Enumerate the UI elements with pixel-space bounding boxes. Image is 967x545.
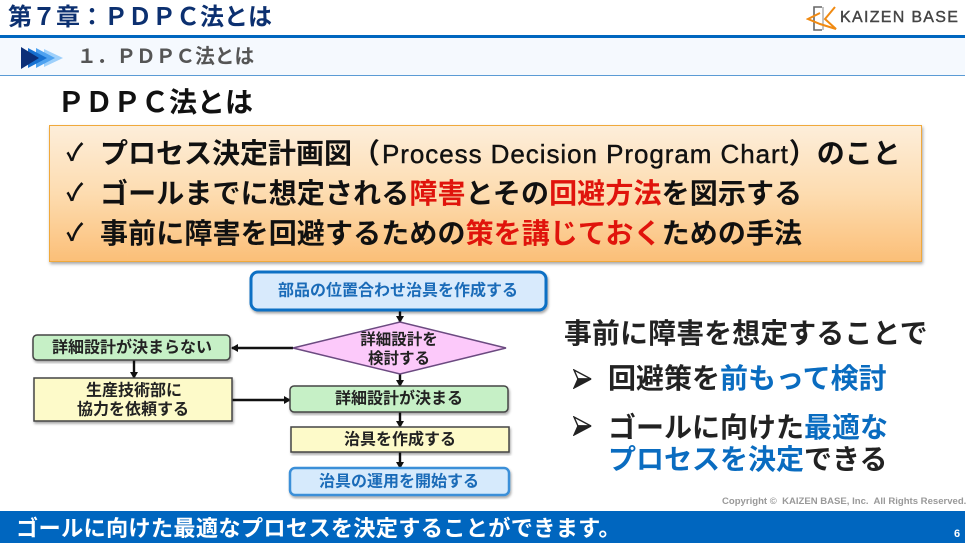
arrow: start to decision [399, 310, 401, 322]
section band [0, 38, 965, 76]
check line 3: ✓ [67, 219, 83, 245]
start node [251, 272, 546, 310]
decision node [293, 322, 506, 374]
footer bar [0, 511, 965, 543]
section heading: １．ＰＤＰＣ法とは [77, 46, 254, 68]
node: undecided [33, 335, 230, 360]
start node: 部品の位置合わせ治具を作成する [278, 280, 518, 300]
node: undecided: 詳細設計が決まらない [52, 338, 212, 356]
node: decided [290, 386, 508, 412]
node: decided: 詳細設計が決まる [335, 388, 463, 408]
text block: benefits heading: 事前に障害を想定することで [564, 318, 928, 349]
page number: 6 [954, 528, 960, 540]
icon: bullet arrow 1 [573, 369, 592, 389]
definition line 1: プロセス決定計画図（Process Decision Program Chart）のこと [100, 138, 901, 169]
logo: KAIZEN BASE: KAIZEN BASE [840, 9, 959, 26]
arrow: request to decided [232, 399, 290, 401]
node: request cooperation: 生産技術部に [86, 380, 182, 400]
arrow: undecided to request [133, 360, 135, 378]
check line 1: ✓ [67, 139, 83, 165]
title: 第７章：ＰＤＰＣ法とは [8, 4, 272, 31]
logo: KAIZEN BASE [806, 6, 959, 31]
node: request cooperation: 協力を依頼する [77, 400, 189, 418]
arrow: make to operate [399, 452, 401, 468]
benefit 2 [608, 412, 888, 475]
node: make jig [291, 427, 509, 452]
main heading: ＰＤＰＣ法とは [57, 87, 253, 118]
node: request cooperation [34, 378, 232, 421]
panel: definition [49, 125, 922, 262]
copyright: Copyright © KAIZEN BASE, Inc. All Rights Reserved. [722, 496, 966, 507]
benefit 1: 回避策を前もって検討 [608, 363, 887, 394]
benefit 2: ゴールに向けた最適な [608, 412, 888, 443]
definition line 3: 事前に障害を回避するための策を講じておくための手法 [100, 218, 802, 249]
decision node: 詳細設計を [360, 330, 438, 348]
header rule [0, 35, 965, 38]
icon: chevrons [21, 47, 63, 69]
footer message: ゴールに向けた最適なプロセスを決定することができます。 [16, 516, 621, 541]
decision node: 検討する [368, 348, 430, 368]
end node [290, 468, 509, 495]
arrow: decision to undecided [232, 347, 293, 349]
flowchart [32, 270, 550, 500]
check line 2: ✓ [67, 179, 83, 205]
end node: 治具の運用を開始する [319, 472, 479, 490]
definition line 2: ゴールまでに想定される障害とその回避方法を図示する [100, 178, 802, 209]
icon: bullet arrow 2 [573, 416, 592, 436]
node: make jig: 治具を作成する [344, 430, 456, 448]
arrow: decision to decided [399, 374, 401, 386]
benefit 2: プロセスを決定できる [608, 444, 887, 475]
arrow: decided to make [399, 412, 401, 427]
